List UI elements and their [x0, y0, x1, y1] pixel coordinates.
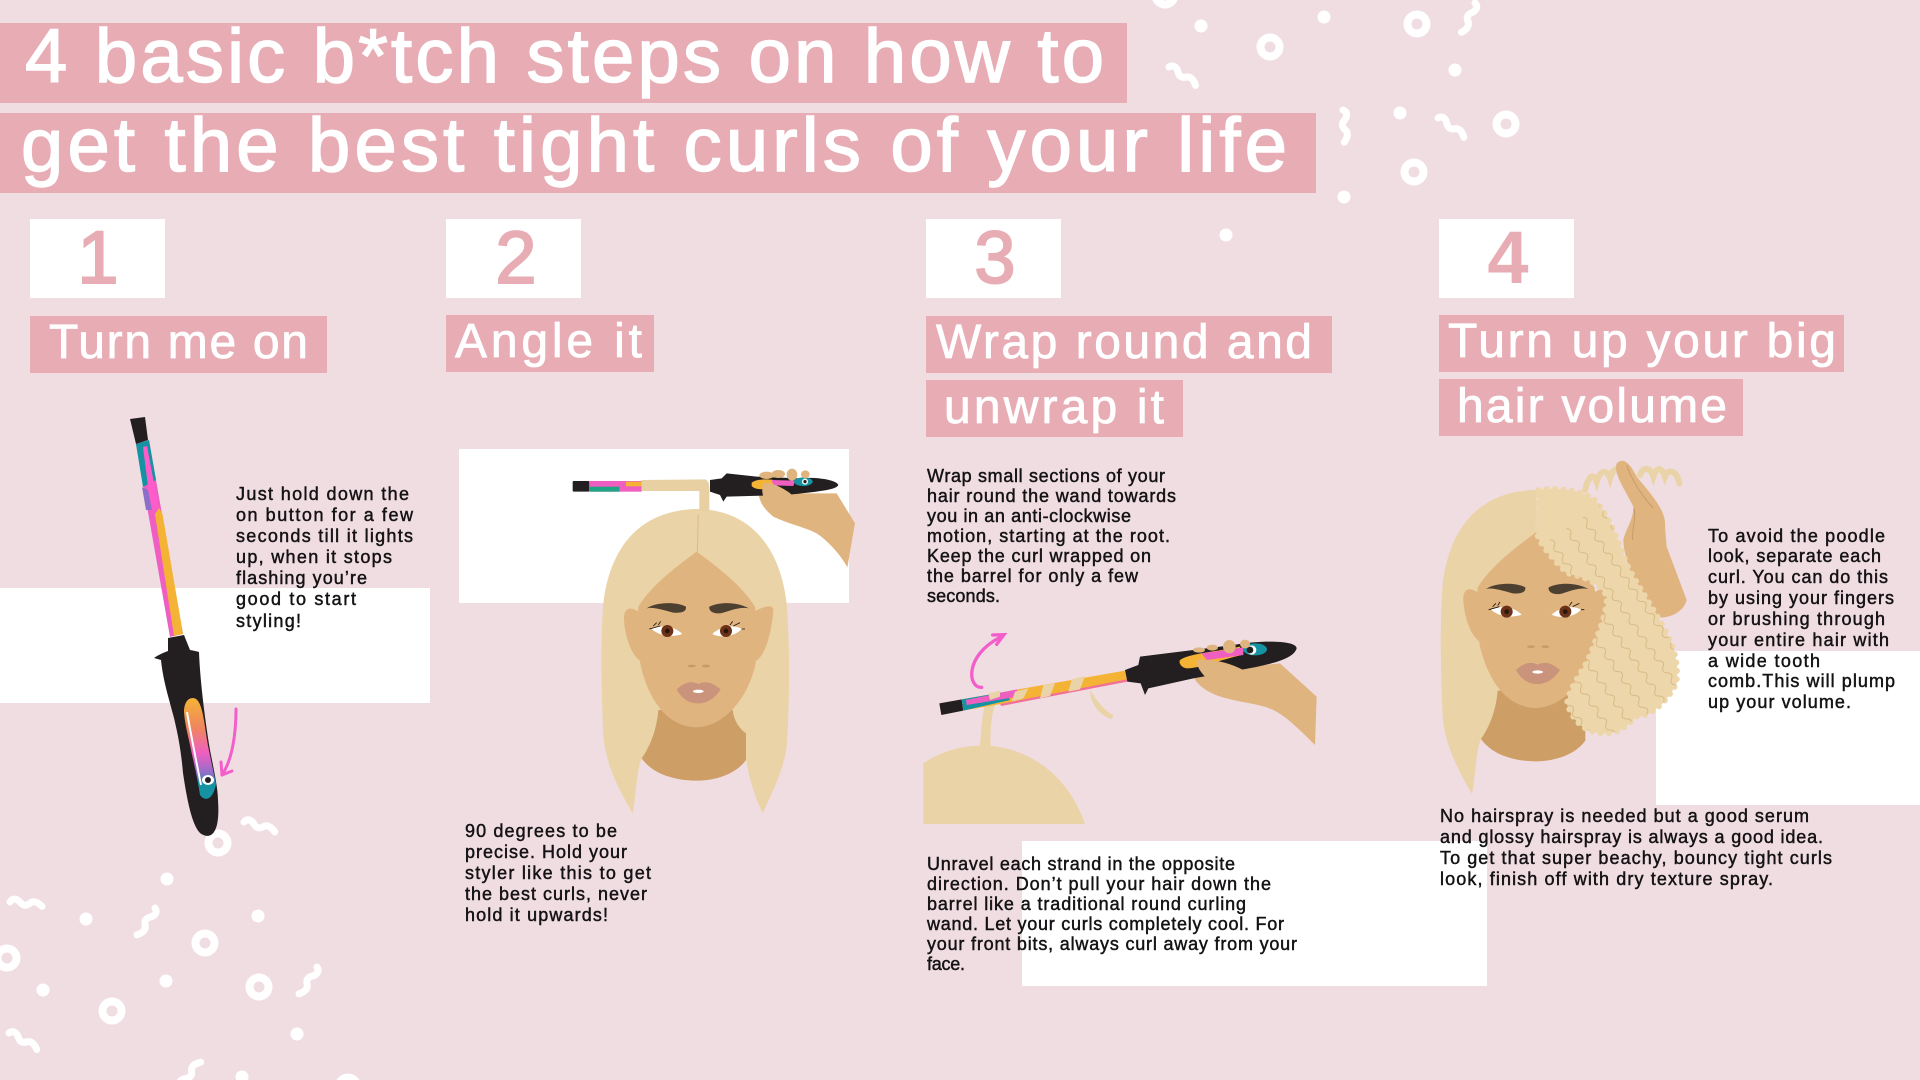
text: wrapping instructions: Keep the curl wrapped on [927, 546, 1151, 566]
number 2 [446, 216, 581, 299]
confetti pattern: top right [1156, 0, 1516, 242]
text: unwrapping instructions: your front bits, always curl away from your [927, 934, 1297, 954]
number 1: 1 [77, 216, 119, 299]
panel: step 4 [1439, 216, 1920, 889]
heading: turn up your big hair volume [1439, 315, 1844, 436]
heading: turn up your big hair volume: hair volume [1457, 380, 1727, 433]
white backing band [0, 588, 430, 703]
heading: turn up your big hair volume: Turn up your big [1448, 315, 1836, 368]
text: unwrapping instructions: barrel like a traditional round curling [927, 894, 1246, 914]
text: step 1 instructions: seconds till it lights [236, 526, 413, 546]
text: wrapping instructions: you in an anti-clockwise [927, 506, 1131, 526]
arrow: press button [221, 709, 236, 775]
text: unwrapping instructions: Unravel each strand in the opposite [927, 854, 1235, 874]
title: get the best tight curls of your life [21, 103, 1287, 188]
arrow: wrap direction [972, 635, 1004, 687]
text: separating curls: comb.This will plump [1708, 671, 1895, 691]
text: step 2 instructions: 90 degrees to be [465, 821, 617, 841]
title: 4 basic b*tch steps on how to [25, 14, 1104, 99]
text: finishing tips [1440, 806, 1832, 889]
text: finishing tips: To get that super beachy, bouncy tight curls [1440, 848, 1832, 868]
text: step 2 instructions: styler like this to get [465, 863, 651, 883]
text: step 2 instructions: the best curls, never [465, 884, 647, 904]
number 2: 2 [495, 216, 537, 299]
text: step 2 instructions: hold it upwards! [465, 905, 608, 925]
text: step 2 instructions: precise. Hold your [465, 842, 627, 862]
text: wrapping instructions: motion, starting at the root. [927, 526, 1170, 546]
text: finishing tips: and glossy hairspray is always a good idea. [1440, 827, 1823, 847]
text: separating curls: a wide tooth [1708, 651, 1820, 671]
panel: step 1 [0, 216, 430, 836]
text: wrapping instructions: Wrap small sections of your [927, 466, 1165, 486]
text: separating curls [1708, 526, 1895, 712]
panel: step 3 [923, 216, 1487, 986]
white backing block [1656, 651, 1920, 805]
text: separating curls: your entire hair with [1708, 630, 1889, 650]
number 3: 3 [974, 216, 1016, 299]
text: step 1 instructions [236, 484, 414, 631]
heading: turn me on: Turn me on [49, 316, 308, 369]
text: separating curls: up your volume. [1708, 692, 1851, 712]
text: step 1 instructions: flashing you’re [236, 568, 367, 588]
text: separating curls: curl. You can do this [1708, 567, 1888, 587]
text: separating curls: look, separate each [1708, 546, 1881, 566]
text: wrapping instructions: the barrel for only a few [927, 566, 1139, 586]
text: finishing tips: No hairspray is needed but a good serum [1440, 806, 1809, 826]
text: step 1 instructions: Just hold down the [236, 484, 409, 504]
text: wrapping instructions [927, 466, 1176, 606]
text: unwrapping instructions: direction. Don’t pull your hair down the [927, 874, 1271, 894]
white backing block [459, 449, 849, 603]
illustration: hair wrapped round wand [923, 640, 1317, 824]
text: finishing tips: look, finish off with dry texture spray. [1440, 869, 1773, 889]
confetti pattern: bottom left [0, 818, 358, 1080]
text: separating curls: by using your fingers [1708, 588, 1894, 608]
heading: wrap round and unwrap it: Wrap round and [936, 316, 1312, 369]
text: separating curls: To avoid the poodle [1708, 526, 1885, 546]
text: wrapping instructions: seconds. [927, 586, 1000, 606]
illustration: face with curly hair and hand [1440, 460, 1687, 794]
number 4: 4 [1487, 216, 1529, 299]
text: step 1 instructions: good to start [236, 589, 356, 609]
icon: curling wand [130, 417, 218, 836]
text: step 1 instructions: on button for a few [236, 505, 414, 525]
heading: wrap round and unwrap it [926, 316, 1332, 437]
number 4 [1439, 216, 1574, 299]
heading: angle it: Angle it [455, 315, 642, 368]
heading: wrap round and unwrap it: unwrap it [944, 381, 1164, 434]
panel: step 2 [446, 216, 855, 925]
text: separating curls: or brushing through [1708, 609, 1885, 629]
text: step 1 instructions: up, when it stops [236, 547, 392, 567]
text: unwrapping instructions [926, 854, 1297, 974]
number 3 [926, 216, 1061, 299]
text: unwrapping instructions: wand. Let your curls completely cool. For [926, 914, 1284, 934]
number 1 [30, 216, 165, 299]
illustration: face with wand at 90 degrees [573, 469, 855, 813]
white backing block [1022, 841, 1487, 986]
text: step 2 instructions [465, 821, 651, 925]
title [0, 14, 1316, 193]
text: unwrapping instructions: face. [927, 954, 965, 974]
text: step 1 instructions: styling! [236, 611, 301, 631]
text: wrapping instructions: hair round the wand towards [927, 486, 1176, 506]
